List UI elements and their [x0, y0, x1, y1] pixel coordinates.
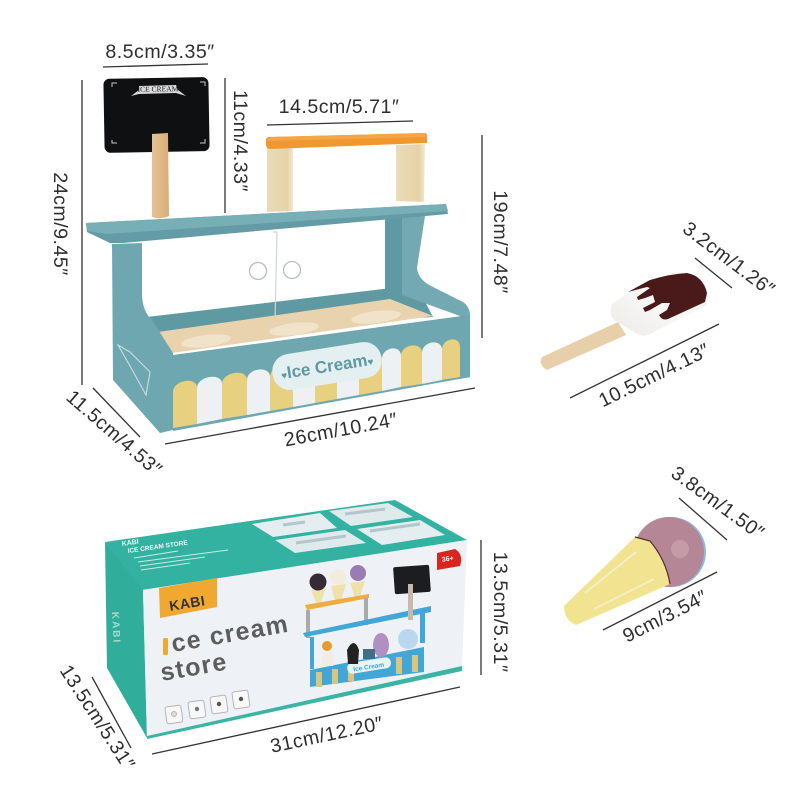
upper orange rail legs	[267, 147, 293, 212]
box headline	[158, 610, 291, 687]
blue shelf on picture	[303, 606, 431, 637]
dimension: rail width	[267, 96, 413, 125]
chocolate coating	[628, 273, 707, 320]
dimension: sign height: 11cm/4.33″	[229, 90, 251, 192]
stick	[541, 322, 626, 370]
dimension: stand width	[165, 388, 475, 451]
box left side	[105, 542, 147, 738]
product: ice cream stand	[86, 77, 470, 433]
ice cream name plate: ♥Ice Cream♥	[280, 350, 375, 383]
dimension: cone length: 9cm/3.54″	[619, 586, 711, 647]
dimension: popsicle length: 10.5cm/4.13″	[595, 339, 713, 412]
dimension: cone length	[603, 572, 717, 647]
dimension: overall height: 24cm/9.45″	[49, 172, 71, 276]
dimension: popsicle length	[570, 324, 719, 412]
box front face	[143, 540, 467, 738]
picture awning stripes	[316, 655, 418, 687]
box side lettering: KABI	[109, 612, 122, 645]
KABI logo	[159, 578, 217, 618]
wooden floor	[158, 299, 433, 353]
dimension: stand depth: 11.5cm/4.53″	[62, 386, 166, 481]
front panel	[173, 315, 470, 431]
blue rim	[636, 517, 706, 587]
box top face	[105, 500, 467, 590]
toy picture on box: Ice Cream	[353, 662, 385, 673]
orange rail on picture	[305, 594, 369, 610]
picture name plate	[346, 657, 392, 674]
left side panel	[112, 243, 173, 433]
dimension: stand width: 26cm/10.24″	[282, 409, 399, 451]
dimension: box width: 31cm/12.20″	[268, 712, 385, 758]
pink ball	[634, 517, 704, 587]
dimension: box depth: 13.5cm/5.31″	[55, 661, 139, 774]
product: popsicle	[541, 272, 707, 370]
dimension: box height: 13.5cm/5.31″	[489, 552, 511, 672]
striped awning	[173, 339, 460, 428]
product: ice cream cone	[564, 517, 706, 625]
chalkboard sign: ICE CREAM	[138, 84, 179, 94]
toy picture on box	[303, 565, 431, 687]
chalkboard sign	[103, 77, 210, 153]
top face pictures	[252, 503, 445, 553]
top face brand text	[121, 539, 228, 570]
dimension: popsicle width: 3.2cm/1.26″	[678, 218, 779, 301]
top face brand text: KABI	[121, 539, 139, 548]
dimension: sign width: 8.5cm/3.35″	[105, 41, 215, 63]
picture sign	[393, 565, 431, 594]
box bottom strip	[147, 666, 462, 739]
scoops on picture	[310, 565, 366, 603]
top face brand text: ICE CREAM STORE	[127, 540, 189, 555]
right support pillar	[385, 216, 470, 379]
box headline: store	[158, 648, 230, 687]
dimension: cone width: 3.8cm/1.50″	[667, 462, 768, 544]
picture stand	[310, 613, 425, 669]
dimension: box height	[481, 540, 511, 675]
age badge: 36+	[441, 555, 454, 564]
product: retail box	[105, 500, 467, 739]
feature icons	[165, 690, 250, 724]
yellow cone	[564, 537, 670, 625]
age badge	[437, 549, 461, 570]
side panel decoration	[118, 345, 150, 395]
sign post	[152, 133, 169, 218]
dimension: box width	[152, 687, 460, 758]
ice cream name plate	[270, 340, 384, 392]
white body	[611, 272, 707, 336]
dimension: rail width: 14.5cm/5.71″	[279, 96, 399, 118]
upper teal shelf	[86, 204, 448, 243]
dimension: body height: 19cm/7.48″	[489, 190, 511, 294]
KABI logo: KABI	[168, 592, 206, 614]
back wall	[147, 288, 433, 333]
picture treats	[322, 629, 418, 666]
orange rail	[266, 133, 427, 149]
box headline: ce cream	[169, 610, 291, 658]
dimension: sign height	[225, 78, 251, 213]
clear acrylic door	[250, 232, 300, 322]
